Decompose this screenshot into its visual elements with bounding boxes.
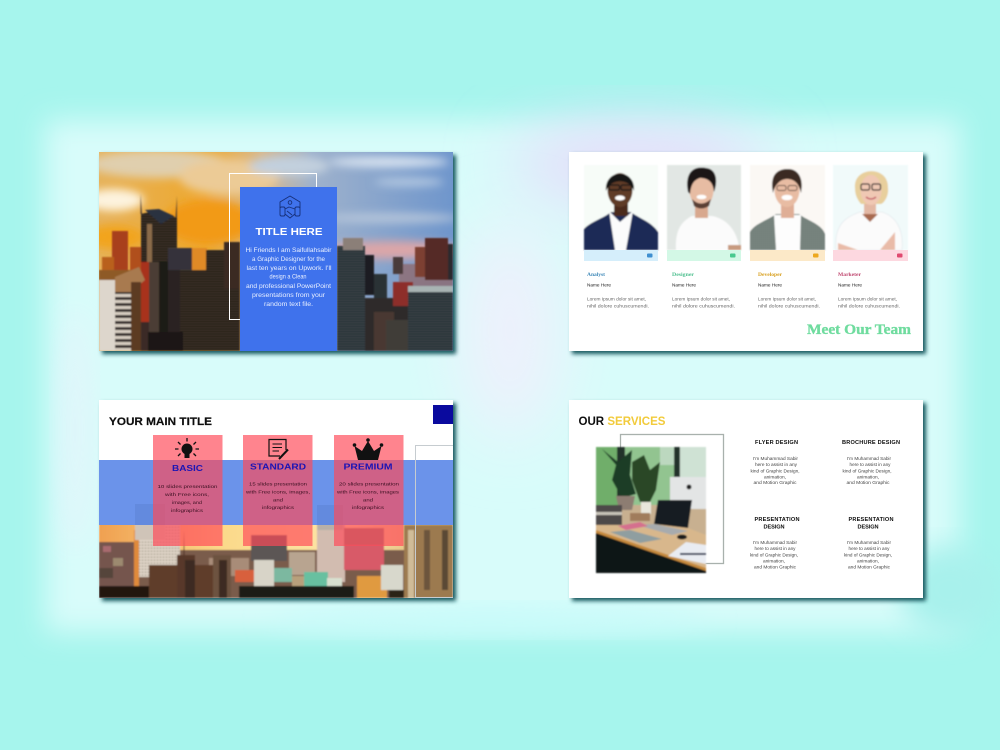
panel: our services slide — [569, 400, 926, 601]
card: standard: infographics — [262, 505, 295, 511]
card: basic: images, and — [172, 500, 202, 506]
member captions: Name Here — [587, 282, 611, 288]
service: flyer design: and Motion Graphic — [754, 480, 797, 486]
colour bars — [584, 250, 908, 261]
heading: meet our team: Meet Our Team — [807, 322, 912, 338]
service: presentation design — [750, 517, 800, 570]
body text: design a Clean — [270, 274, 306, 280]
panel: pricing slide — [99, 400, 456, 601]
city photo — [99, 500, 453, 598]
service: flyer design: here to assist in any — [755, 462, 798, 468]
member captions: nihil dolore cuhuscumendi. — [587, 304, 649, 308]
card: premium: with Free icons, images — [337, 490, 400, 496]
service: brochure design: and Motion Graphic — [846, 480, 890, 486]
card: basic: 10 slides presentation — [158, 484, 218, 490]
member captions: nihil dolore cuhuscumendi. — [758, 304, 820, 308]
body text — [246, 248, 332, 308]
heading: title here: TITLE HERE — [256, 227, 323, 238]
service: presentation design: DESIGN — [764, 524, 784, 530]
service: presentation design: PRESENTATION — [754, 517, 800, 523]
blue band — [99, 460, 453, 525]
card: basic — [153, 435, 222, 546]
blue text panel — [240, 187, 337, 351]
grey outline frame — [620, 434, 724, 564]
member captions: Lorem Ipsum dolor sit amet, — [672, 296, 730, 302]
member captions: nihil dolore cuhuscumendi. — [838, 304, 900, 308]
service: brochure design: BROCHURE DESIGN — [842, 440, 900, 446]
body text: a Graphic Designer for the — [252, 257, 326, 263]
body text: presentations from your — [252, 293, 325, 299]
card: standard: and — [273, 498, 283, 504]
service: presentation design: and Motion Graphic — [754, 564, 797, 570]
icon: document with pen — [269, 440, 288, 459]
card: basic: with Free icons, — [165, 492, 209, 498]
card: standard: 15 slides presentation — [249, 482, 307, 488]
grey outline frame — [416, 446, 453, 598]
member captions: Lorem Ipsum dolor sit amet, — [587, 296, 646, 302]
accent square — [433, 405, 453, 424]
card: standard — [243, 435, 312, 546]
service: presentation design second: I'm Muhammad Sabir — [847, 540, 891, 546]
team photos — [584, 165, 908, 250]
team member: analyst — [584, 165, 658, 250]
card: premium: 20 slides presentation — [339, 482, 399, 488]
member captions: Designer — [672, 273, 695, 278]
member captions: Developer — [758, 273, 783, 278]
service: presentation design second — [844, 517, 894, 570]
panel: meet our team slide — [569, 152, 926, 354]
service: brochure design: here to assist in any — [850, 462, 891, 468]
service: presentation design: animation, — [763, 558, 785, 564]
member captions: Lorem Ipsum dolor sit amet, — [758, 296, 816, 302]
team member: marketer — [833, 165, 908, 250]
service: presentation design second: here to assist in any — [848, 546, 890, 552]
service: presentation design: here to assist in any — [754, 546, 796, 552]
white outline frame — [230, 174, 316, 320]
heading: your main title: YOUR MAIN TITLE — [109, 416, 212, 428]
body text: last ten years on Upwork. I'll — [246, 266, 332, 272]
card: standard: STANDARD — [250, 462, 306, 472]
service: flyer design — [750, 440, 800, 486]
member captions: Name Here — [758, 282, 782, 288]
service: presentation design: I'm Muhammad Sabir — [753, 540, 797, 546]
icon: crown — [353, 438, 383, 460]
service: presentation design second: animation, — [857, 558, 879, 564]
desk photo — [596, 447, 706, 573]
service: flyer design: FLYER DESIGN — [755, 440, 798, 446]
member captions — [587, 273, 900, 308]
service: flyer design: I'm Muhammad Sabir — [753, 456, 798, 462]
service: flyer design: animation, — [764, 474, 786, 480]
card: basic: BASIC — [172, 463, 203, 473]
icon: light bulb — [175, 438, 199, 458]
service: brochure design: I'm Muhammad Sabir — [847, 456, 891, 462]
service: presentation design: kind of Graphic Design, — [750, 552, 798, 558]
body text: random text file. — [264, 302, 313, 308]
heading: our services: OUR SERVICES — [578, 414, 666, 428]
team member: developer — [750, 165, 825, 250]
panel: title slide — [84, 150, 464, 354]
service: brochure design — [842, 440, 900, 486]
icon: house with handshake — [280, 196, 300, 218]
card: basic: infographics — [171, 508, 204, 514]
member captions: nihil dolore cuhuscumendi. — [672, 304, 735, 308]
card: standard: with Free icons, images, — [246, 490, 310, 496]
member captions: Name Here — [672, 282, 696, 288]
service: presentation design second: PRESENTATION — [848, 517, 894, 523]
card: premium: and — [363, 498, 373, 504]
member captions: Marketer — [838, 273, 862, 278]
service: presentation design second: kind of Graphic Design, — [844, 552, 892, 558]
service: presentation design second: DESIGN — [858, 524, 878, 530]
team member: designer — [667, 165, 741, 250]
background glow — [45, 120, 1000, 635]
member captions: Lorem Ipsum dolor sit amet, — [838, 296, 897, 302]
city sunset photo — [84, 150, 464, 351]
card: premium — [334, 435, 404, 546]
member captions: Analyst — [587, 273, 605, 278]
service: flyer design: kind of Graphic Design, — [750, 468, 800, 474]
card: premium: PREMIUM — [344, 462, 392, 472]
member captions: Name Here — [838, 282, 862, 288]
body text: Hi Friends I am Saifullahsabir — [246, 248, 332, 254]
service: presentation design second: and Motion Graphic — [848, 564, 891, 570]
service: brochure design: animation, — [857, 474, 879, 480]
body text: and professional PowerPoint — [246, 284, 331, 290]
card: premium: infographics — [352, 505, 385, 511]
service: brochure design: kind of Graphic Design, — [842, 468, 892, 474]
